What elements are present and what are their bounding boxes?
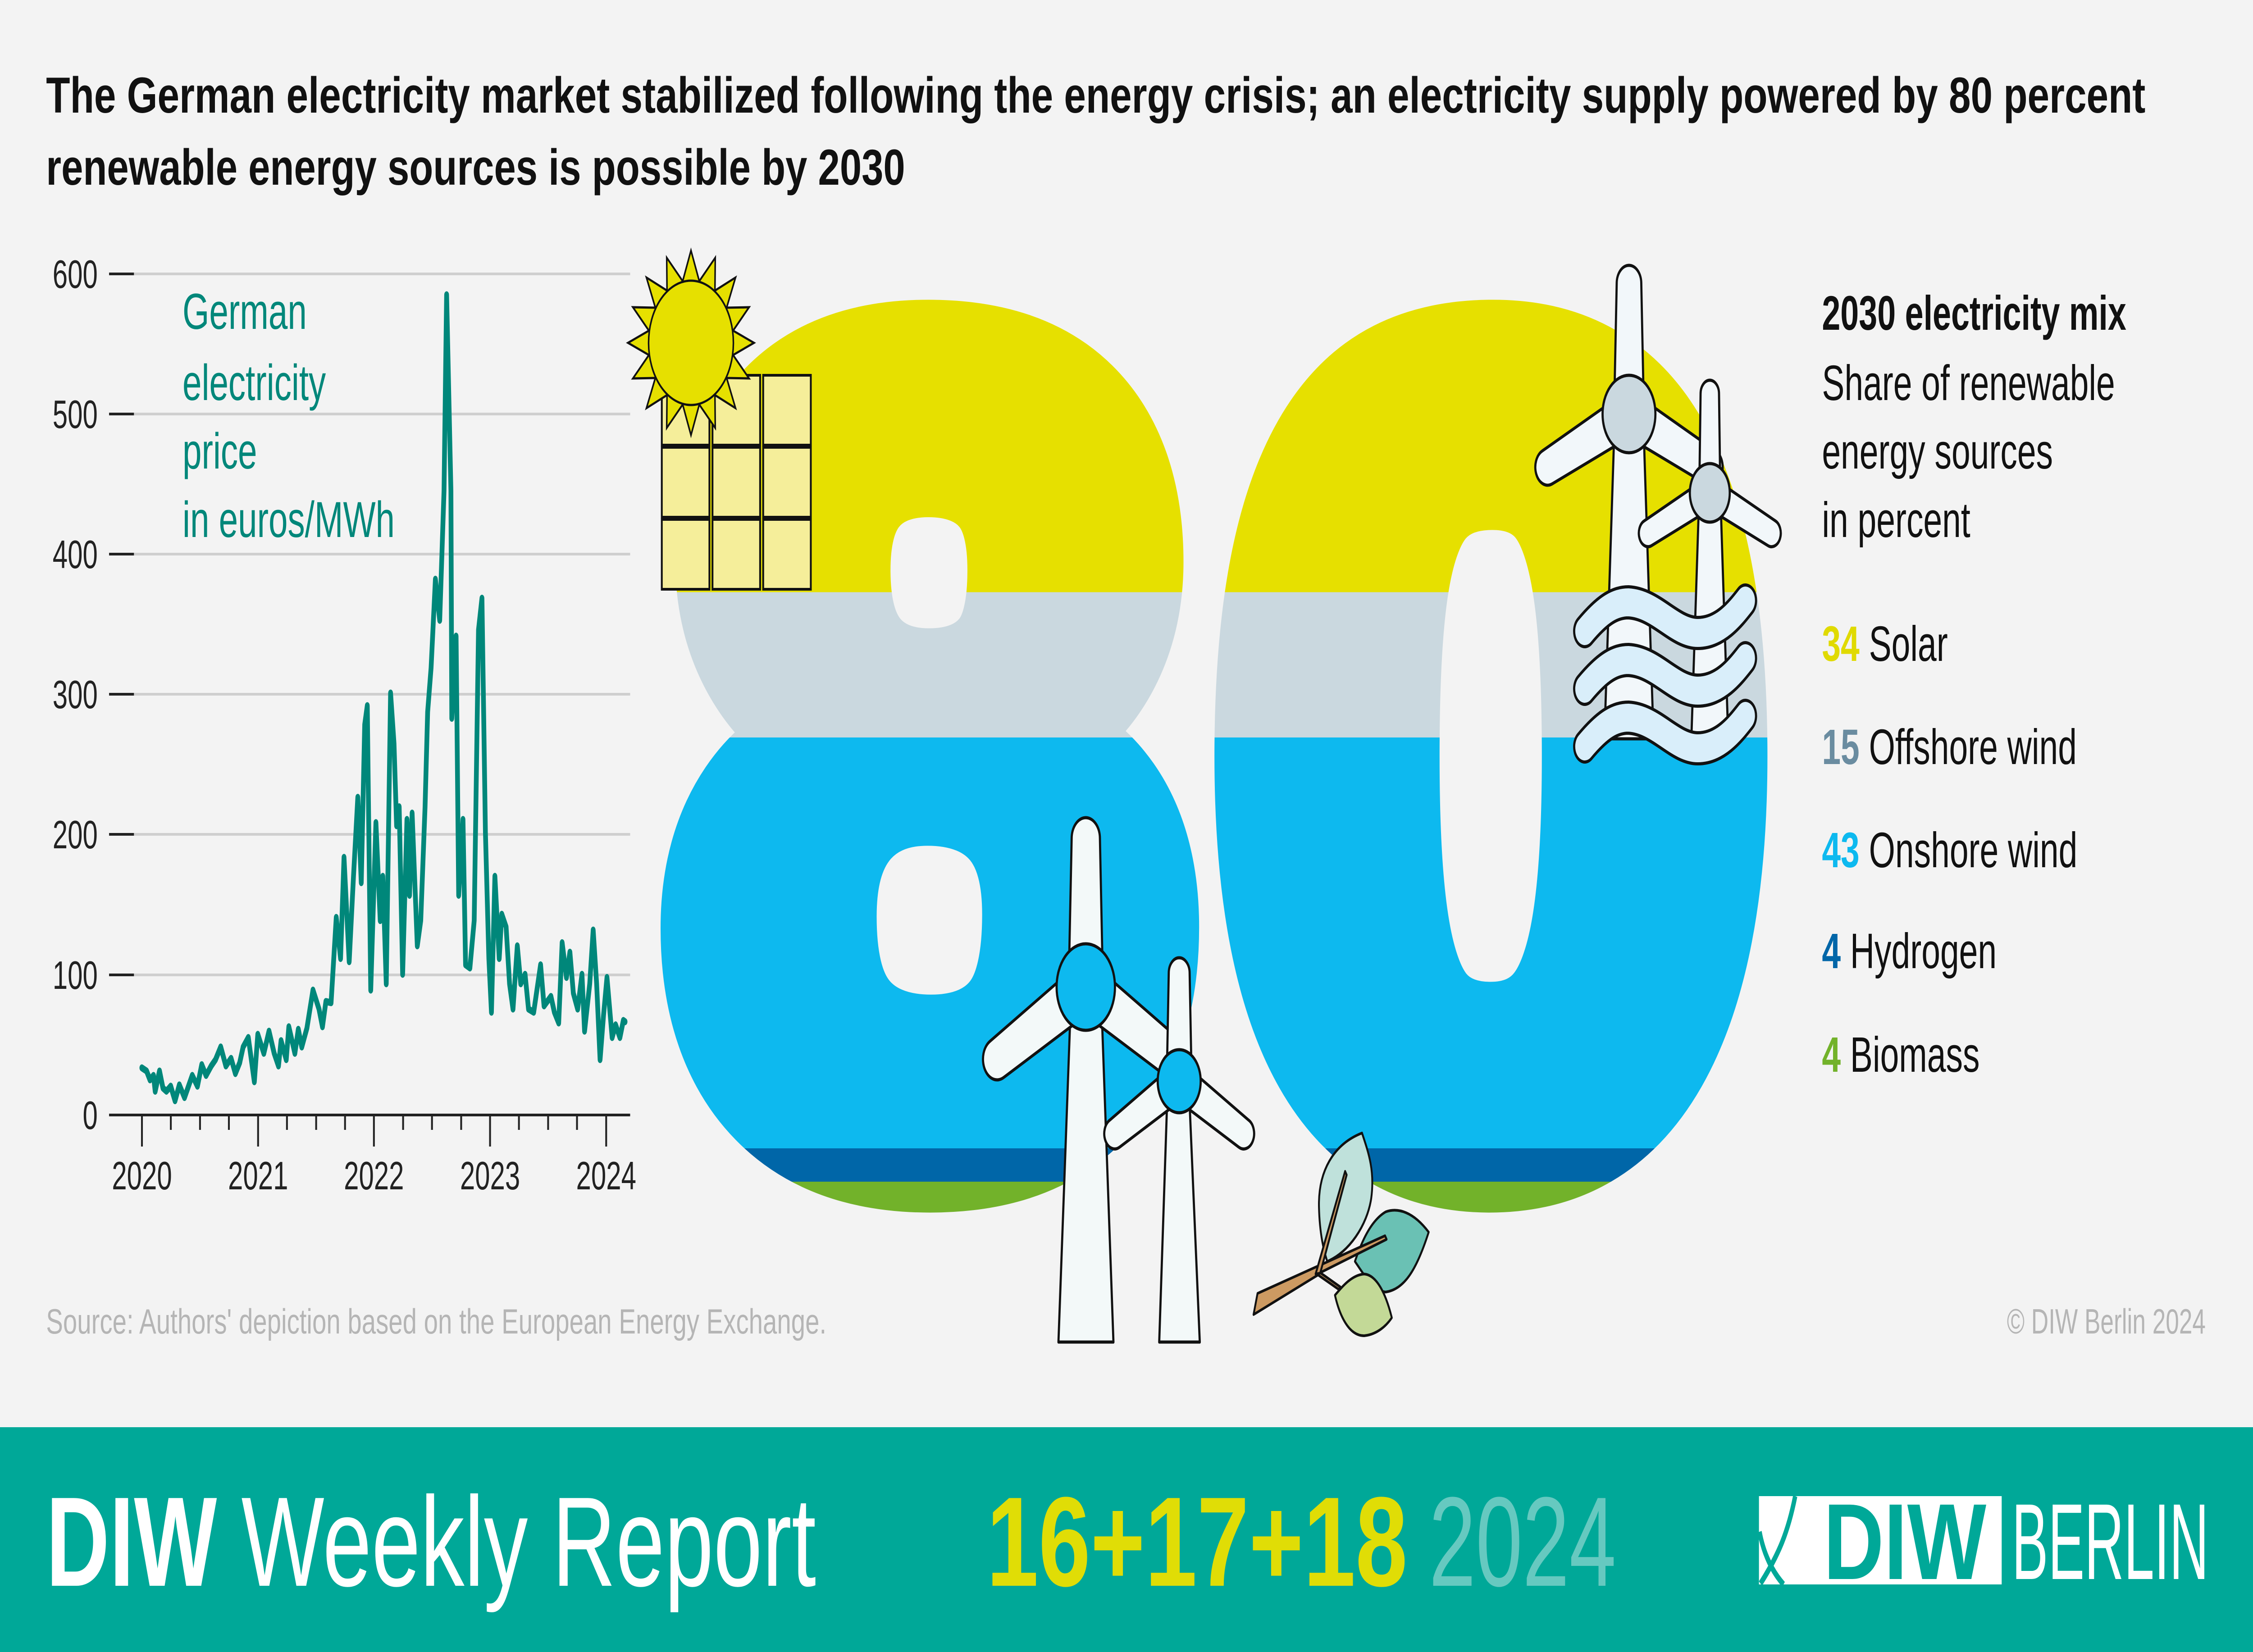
line chart: electricity price: 2020 (112, 1154, 172, 1198)
icon: onshore wind turbines (976, 818, 1259, 1342)
icon: waves (1585, 601, 1746, 748)
title: renewable energy sources is possible by 2030 (46, 140, 905, 196)
line chart: electricity price: 300 (53, 673, 98, 717)
source note: Source: Authors' depiction based on the European Energy Exchange. (46, 1302, 826, 1342)
footer title: DIW Weekly Report (46, 1471, 816, 1613)
icon: leaves (1254, 1133, 1429, 1336)
icon: sun (628, 250, 754, 435)
icon: offshore wind turbines (1530, 265, 1784, 739)
legend: 2030 electricity mix: 15 Offshore wind (1822, 719, 2077, 774)
icon: solar panel (662, 375, 811, 589)
line chart: electricity price: 500 (53, 392, 98, 437)
legend: 2030 electricity mix: energy sources (1822, 424, 2053, 479)
line chart: electricity price: 200 (53, 813, 98, 857)
issue number: 16+17+18 (986, 1471, 1408, 1613)
copyright: © DIW Berlin 2024 (2007, 1302, 2206, 1342)
line chart: electricity price: 2021 (228, 1154, 288, 1198)
big number 80: 0 (1222, 118, 1761, 1388)
line chart: electricity price: 400 (53, 532, 98, 577)
line chart: electricity price: 0 (82, 1093, 98, 1138)
legend: 2030 electricity mix: Share of renewable (1822, 355, 2115, 410)
footer band: 2024 (1429, 1471, 1616, 1613)
big number 80 (675, 118, 1761, 1388)
big number 80: 8 (675, 119, 1184, 1388)
legend: 2030 electricity mix: 4 Biomass (1822, 1027, 1979, 1082)
chart label: price (182, 423, 257, 480)
legend: 2030 electricity mix (1822, 286, 2126, 1082)
legend: 2030 electricity mix: 34 Solar (1822, 616, 1948, 671)
logo: DIW Berlin (1759, 1481, 2209, 1602)
line chart: electricity price: 2022 (344, 1154, 404, 1198)
chart label: in euros/MWh (182, 492, 395, 548)
line chart: electricity price (53, 252, 636, 1198)
line chart: electricity price: 100 (53, 953, 98, 997)
legend: 2030 electricity mix: 2030 electricity mix (1822, 286, 2126, 340)
line chart: electricity price: 2024 (576, 1154, 636, 1198)
line chart: electricity price: 2023 (460, 1154, 520, 1198)
title: The German electricity market stabilized following the energy crisis; an electricity supply powered by 80 percent (46, 68, 2145, 124)
legend: 2030 electricity mix: 4 Hydrogen (1822, 924, 1997, 978)
chart label: German (182, 284, 307, 340)
line chart: electricity price: 600 (53, 252, 98, 296)
legend: 2030 electricity mix: in percent (1822, 492, 1970, 547)
chart label: electricity (182, 355, 326, 411)
logo: DIW Berlin: DIW (1824, 1481, 1986, 1602)
legend: 2030 electricity mix: 43 Onshore wind (1822, 823, 2077, 878)
title (46, 68, 2145, 196)
footer band (0, 1427, 2253, 1652)
chart label (182, 284, 395, 548)
